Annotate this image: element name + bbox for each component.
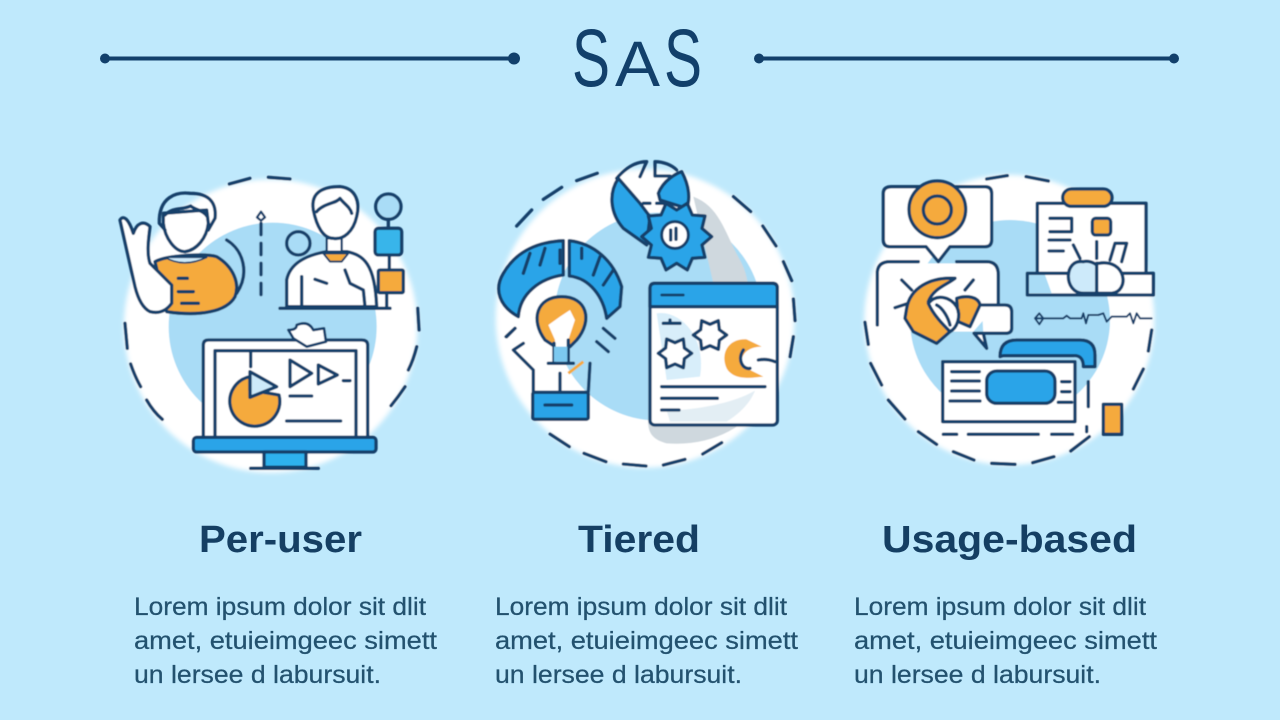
light blue blob	[169, 223, 377, 431]
icon: left user waving	[120, 193, 244, 314]
light blue blob	[910, 220, 1110, 420]
icon: dashed upward arrow	[257, 212, 265, 297]
white disc	[496, 169, 794, 468]
icon: lightbulb head	[499, 241, 622, 419]
description: usage-based	[854, 593, 1157, 689]
icon: small card	[974, 305, 1012, 348]
icon: whiteboard with apples	[1027, 189, 1153, 295]
illustration: tiered	[496, 162, 795, 468]
dashed ring	[125, 177, 419, 419]
icon: stacked cards	[943, 340, 1095, 434]
description: tiered	[495, 593, 798, 689]
description: per-user	[134, 593, 437, 689]
panel: tiered	[495, 162, 798, 689]
title: SAS: S	[572, 13, 610, 104]
description: tiered: un lersee d labursuit.	[495, 661, 742, 689]
light blue blob	[554, 213, 762, 421]
title: SAS: A	[615, 28, 660, 100]
left header rule	[100, 52, 520, 64]
white disc	[124, 179, 417, 473]
description: per-user: amet, etuieimgeec simett	[134, 627, 437, 655]
icon: handshake	[895, 278, 980, 343]
icon: speech bubble with person	[877, 181, 998, 332]
description: usage-based: amet, etuieimgeec simett	[854, 627, 1157, 655]
description: tiered: amet, etuieimgeec simett	[495, 627, 798, 655]
heading: Usage-based: Usage-based	[882, 519, 1137, 561]
description: usage-based: un lersee d labursuit.	[854, 661, 1101, 689]
description: per-user: un lersee d labursuit.	[134, 661, 381, 689]
icon: laptop with charts	[193, 323, 376, 468]
description: tiered: Lorem ipsum dolor sit dlit	[495, 593, 787, 621]
description: per-user: Lorem ipsum dolor sit dlit	[134, 593, 426, 621]
title: SAS: S	[664, 13, 702, 104]
dashed ring	[506, 173, 795, 466]
illustration: usage-based	[864, 175, 1154, 465]
right header rule	[754, 54, 1179, 64]
panel: usage-based	[854, 175, 1157, 689]
gray shadow	[648, 197, 767, 444]
heading: Tiered: Tiered	[578, 519, 700, 561]
icon: right user with nodes	[280, 187, 403, 308]
white disc	[864, 175, 1154, 465]
dashed ring	[865, 176, 1152, 464]
title: SAS	[572, 13, 702, 104]
panel: per-user	[120, 177, 437, 689]
icon: waveform	[1035, 313, 1152, 324]
title header	[100, 13, 1179, 104]
description: usage-based: Lorem ipsum dolor sit dlit	[854, 593, 1146, 621]
icon: browser window	[650, 283, 777, 425]
icon: small orange tag	[1103, 404, 1122, 434]
illustration: per-user	[120, 177, 419, 473]
icon: gear with fan	[612, 162, 712, 270]
heading: Per-user: Per-user	[199, 519, 362, 561]
